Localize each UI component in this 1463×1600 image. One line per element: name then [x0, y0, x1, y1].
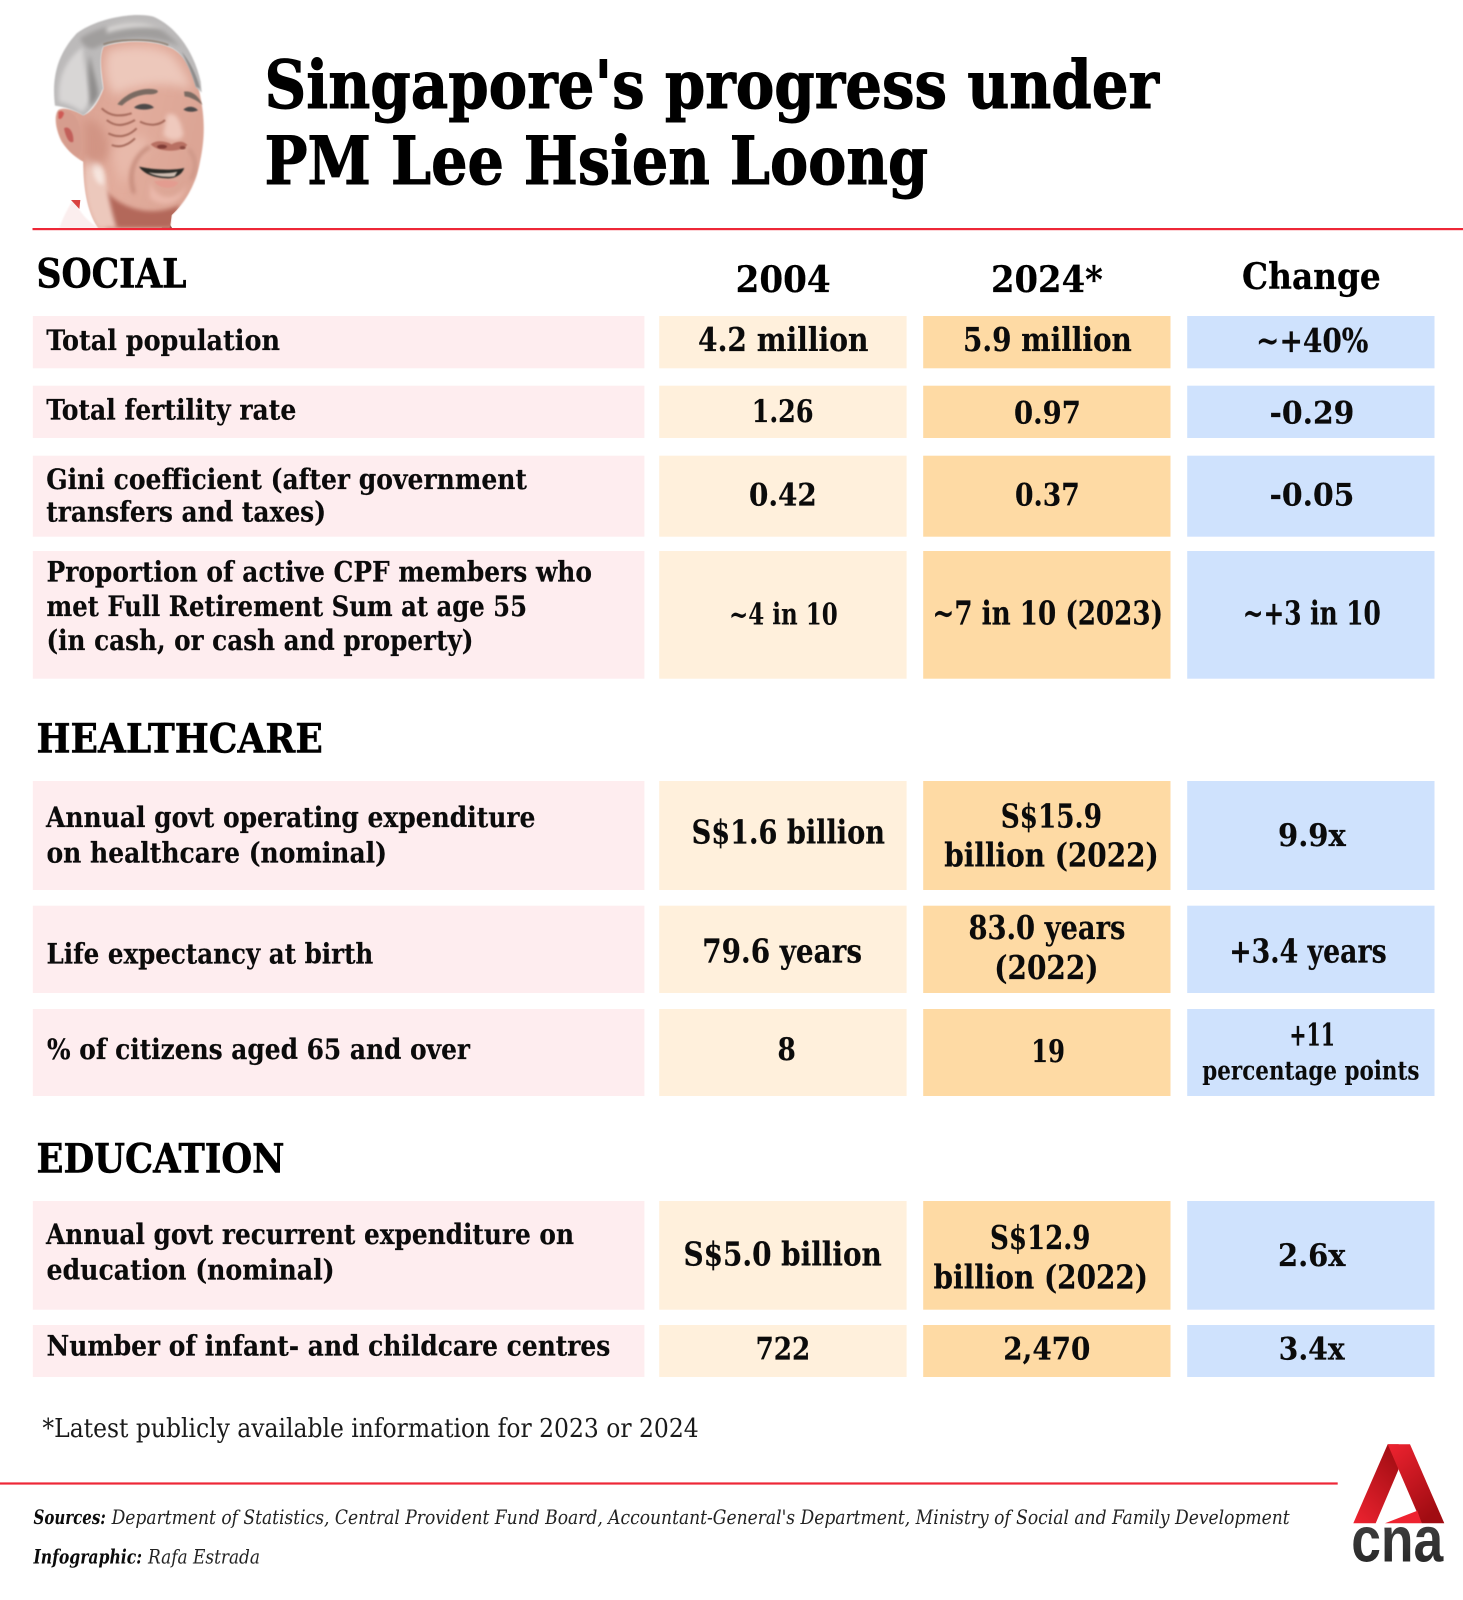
row: citizens aged 65 and over: 19 [1031, 1034, 1065, 1070]
row: life expectancy: +3.4 years [1229, 932, 1387, 970]
row: gini coefficient: 0.42 [749, 478, 817, 514]
row: total fertility rate [33, 386, 1434, 438]
sources: Sources: [34, 1505, 106, 1529]
row: total population: 4.2 million [698, 320, 868, 359]
row: citizens aged 65 and over: 8 [778, 1032, 796, 1068]
title: Singapore's progress under [264, 46, 1160, 124]
row: life expectancy: 83.0 years [968, 908, 1125, 947]
row: citizens aged 65 and over [33, 1009, 1434, 1096]
row: total population: Total population [46, 324, 280, 357]
row: gini coefficient: -0.05 [1270, 478, 1354, 514]
heading: social: SOCIAL [36, 250, 186, 298]
row: total fertility rate: Total fertility rate [46, 393, 296, 426]
row: CPF members [33, 551, 1434, 679]
column heading: 2024: 2024* [991, 259, 1103, 301]
row: citizens aged 65 and over: % of citizens aged 65 and over [47, 1033, 471, 1066]
row: education expenditure: S$5.0 billion [684, 1235, 882, 1274]
row: life expectancy [33, 906, 1434, 993]
title: PM Lee Hsien Loong [264, 122, 928, 200]
row: gini coefficient: 0.37 [1015, 478, 1080, 514]
section: social [33, 250, 1434, 679]
row: life expectancy: (2022) [994, 948, 1098, 987]
row: healthcare expenditure: S$1.6 billion [692, 812, 885, 851]
column heading: change: Change [1242, 256, 1381, 298]
row: childcare centres: 722 [756, 1332, 810, 1368]
row: life expectancy: 79.6 years [702, 932, 862, 970]
row: CPF members: Proportion of active CPF members who [46, 556, 592, 589]
row: total fertility rate: 0.97 [1014, 396, 1081, 432]
row: CPF members: ~7 in 10 (2023) [932, 594, 1163, 632]
footnote: *Latest publicly available information for 2023 or 2024 [42, 1414, 699, 1444]
row: life expectancy: Life expectancy at birth [46, 937, 373, 970]
row: education expenditure: 2.6x [1278, 1238, 1346, 1274]
row: healthcare expenditure: Annual govt operating expenditure [45, 801, 535, 834]
row: healthcare expenditure: billion (2022) [944, 836, 1159, 875]
infographic credit [33, 1544, 260, 1568]
sources: Department of Statistics, Central Provident Fund Board, Accountant-General's Department, Ministry of Social and Family Development [111, 1505, 1290, 1529]
row: citizens aged 65 and over: percentage points [1202, 1056, 1420, 1086]
row: CPF members: ~+3 in 10 [1243, 594, 1381, 632]
infographic credit: Rafa Estrada [147, 1544, 260, 1568]
row: total fertility rate: 1.26 [752, 394, 814, 430]
row: total population [33, 316, 1434, 368]
row: citizens aged 65 and over: +11 [1289, 1018, 1335, 1054]
row: education expenditure: billion (2022) [934, 1257, 1148, 1296]
row: gini coefficient: Gini coefficient (after government [46, 463, 527, 496]
column heading: 2004: 2004 [736, 259, 831, 301]
row: gini coefficient [33, 456, 1434, 537]
heading: healthcare: HEALTHCARE [36, 716, 323, 763]
row: healthcare expenditure: on healthcare (nominal) [46, 836, 387, 869]
icon: CNA logo: cna [1351, 1504, 1444, 1576]
row: childcare centres: Number of infant- and childcare centres [46, 1330, 610, 1363]
section: healthcare [33, 716, 1434, 1096]
row: CPF members: (in cash, or cash and property) [46, 624, 474, 657]
row: childcare centres: 2,470 [1003, 1332, 1090, 1368]
row: CPF members: ~4 in 10 [729, 598, 838, 632]
row: childcare centres: 3.4x [1279, 1332, 1345, 1368]
row: childcare centres [33, 1325, 1434, 1377]
row: healthcare expenditure: 9.9x [1278, 818, 1346, 854]
row: education expenditure [33, 1201, 1434, 1310]
row: education expenditure: Annual govt recurrent expenditure on [45, 1218, 574, 1251]
row: education expenditure: education (nominal) [46, 1253, 335, 1286]
row: total fertility rate: -0.29 [1270, 396, 1354, 432]
title [264, 46, 1160, 200]
section: education [33, 1136, 1434, 1377]
row: healthcare expenditure: S$15.9 [1001, 796, 1102, 835]
row: CPF members: met Full Retirement Sum at age 55 [46, 590, 527, 623]
icon: CNA logo [1351, 1444, 1444, 1576]
row: education expenditure: S$12.9 [990, 1218, 1090, 1257]
row: total population: ~+40% [1256, 321, 1368, 360]
row: healthcare expenditure [33, 781, 1434, 890]
infographic credit: Infographic: [33, 1544, 142, 1568]
row: total population: 5.9 million [963, 320, 1132, 359]
heading: education: EDUCATION [36, 1136, 284, 1183]
portrait of PM Lee Hsien Loong [54, 15, 204, 228]
row: gini coefficient: transfers and taxes) [46, 496, 326, 529]
